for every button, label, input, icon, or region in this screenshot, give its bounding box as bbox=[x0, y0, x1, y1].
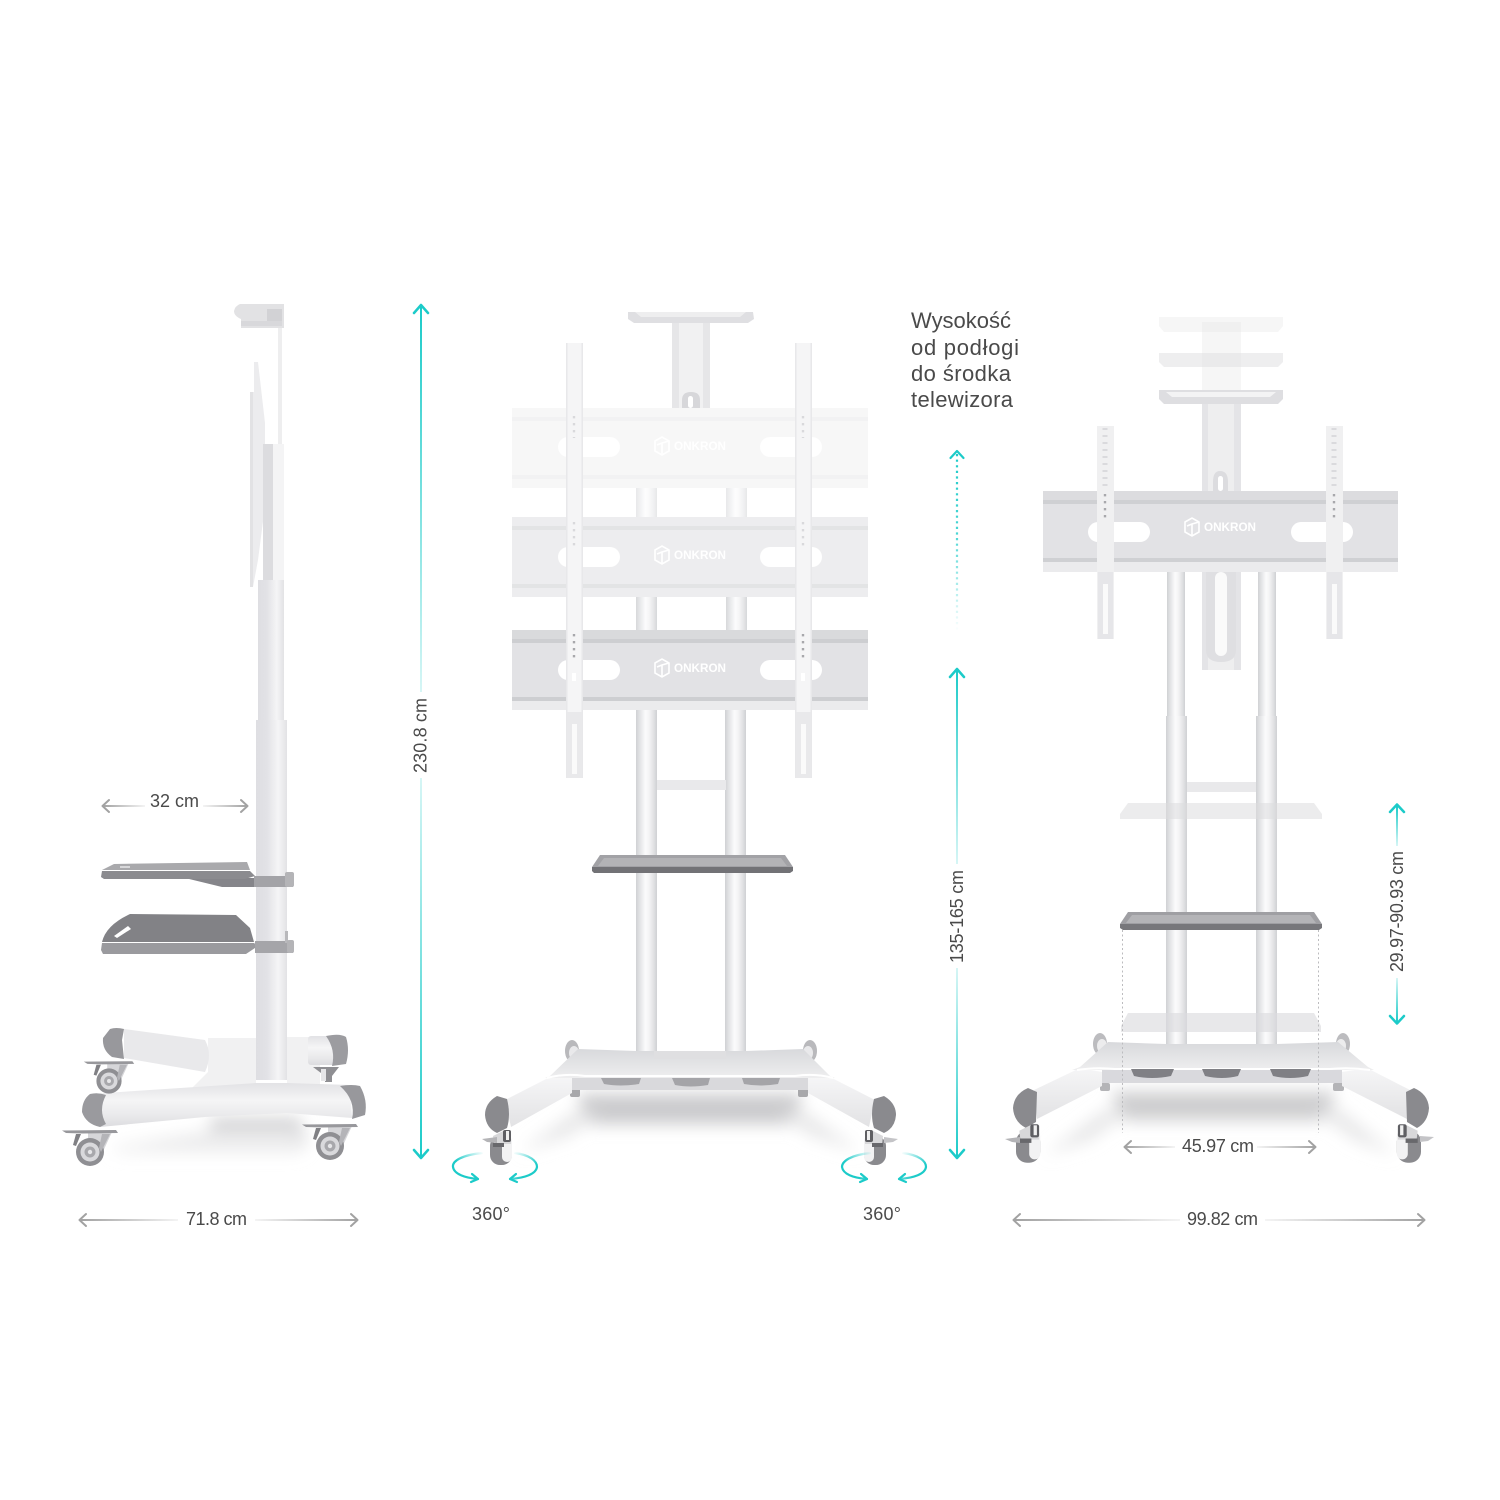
right view right vesa strip bbox=[1326, 426, 1343, 639]
label: height from floor to TV centre bbox=[911, 308, 1019, 412]
right view ghost upper shelf bbox=[1120, 803, 1322, 819]
right view ghost lower shelf bbox=[1121, 1013, 1321, 1032]
dimension: 71.8 cm: 71.8 cm bbox=[186, 1209, 247, 1229]
front view ghost mounting plate middle bbox=[512, 517, 868, 597]
front view floor shadow bbox=[520, 1094, 860, 1152]
front view top shelf bbox=[628, 312, 754, 408]
dimension: 135-165 cm: 135-165 cm bbox=[947, 870, 967, 963]
dimension: 45.97 cm: 45.97 cm bbox=[1182, 1136, 1254, 1156]
front view shelf bbox=[592, 855, 793, 873]
right view ghost top shelves bbox=[1159, 317, 1283, 404]
right view rear column bbox=[1202, 404, 1241, 670]
dimension: 99.82 cm: 99.82 cm bbox=[1187, 1209, 1258, 1229]
label: 360 left: 360° bbox=[472, 1204, 510, 1224]
dimension: 45.97 cm bbox=[1124, 1136, 1316, 1156]
side view top shelf bbox=[234, 304, 284, 446]
front view high logo bbox=[655, 437, 726, 455]
right view right caster bbox=[1397, 1088, 1434, 1163]
side view floor shadow bbox=[112, 1118, 306, 1152]
right view logo: ONKRON bbox=[1204, 522, 1256, 534]
right view shelf bbox=[1120, 912, 1322, 930]
dimension: 99.82 cm bbox=[1014, 1209, 1425, 1229]
front view high logo: ONKRON bbox=[674, 441, 726, 453]
dimension: 135-165 cm bbox=[947, 451, 967, 1158]
label: height from floor to TV centre: Wysokość bbox=[911, 308, 1011, 333]
dimension: 230.8 cm: 230.8 cm bbox=[410, 698, 430, 773]
label: height from floor to TV centre: telewizora bbox=[911, 387, 1014, 412]
panel: right view bbox=[1005, 317, 1434, 1163]
front view middle logo bbox=[655, 546, 726, 564]
dimension: 71.8 cm bbox=[80, 1209, 358, 1229]
dimension: 230.8 cm bbox=[410, 305, 430, 1158]
panel: front view bbox=[482, 312, 898, 1165]
side view TV bracket bbox=[250, 362, 265, 587]
label: height from floor to TV centre: od podłogi bbox=[911, 335, 1019, 360]
dimension: 29.97-90.93 cm bbox=[1387, 804, 1407, 1024]
right view poles bbox=[1166, 572, 1277, 1056]
side view base bbox=[82, 1028, 366, 1127]
dimension: 29.97-90.93 cm: 29.97-90.93 cm bbox=[1387, 851, 1407, 972]
front view ghost mounting plate high bbox=[512, 408, 868, 488]
dimension: 32 cm: 32 cm bbox=[150, 791, 199, 811]
right view logo bbox=[1185, 518, 1256, 536]
front view mounting plate bbox=[512, 630, 868, 710]
right view mounting plate bbox=[1043, 491, 1398, 572]
right view base bbox=[1034, 1033, 1410, 1119]
right view floor shadow bbox=[1045, 1092, 1395, 1155]
side view upper shelf bbox=[101, 862, 294, 887]
front view right vesa strip bbox=[795, 343, 812, 778]
side view casters bbox=[62, 1061, 358, 1166]
front view logo: ONKRON bbox=[674, 663, 726, 675]
front view logo bbox=[655, 659, 726, 677]
side view lower column bbox=[256, 720, 287, 1080]
shelf width guide lines bbox=[1122, 930, 1318, 1133]
right view left vesa strip bbox=[1097, 426, 1114, 639]
front view left vesa strip bbox=[566, 343, 583, 778]
label: 360 right: 360° bbox=[863, 1204, 901, 1224]
side view upper column bbox=[258, 444, 284, 720]
side view lower shelf bbox=[101, 914, 294, 954]
panel: side view bbox=[62, 304, 366, 1166]
rotation arrows: left caster bbox=[453, 1153, 537, 1182]
front view poles bbox=[636, 488, 747, 1062]
front view base bbox=[505, 1040, 875, 1127]
dimension: 32 cm bbox=[102, 791, 248, 812]
front view middle logo: ONKRON bbox=[674, 550, 726, 562]
right view left caster bbox=[1005, 1088, 1040, 1163]
rotation arrows: right caster bbox=[842, 1153, 926, 1182]
front view right caster bbox=[864, 1096, 898, 1165]
label: height from floor to TV centre: do środka bbox=[911, 361, 1012, 386]
front view left caster bbox=[482, 1096, 512, 1165]
